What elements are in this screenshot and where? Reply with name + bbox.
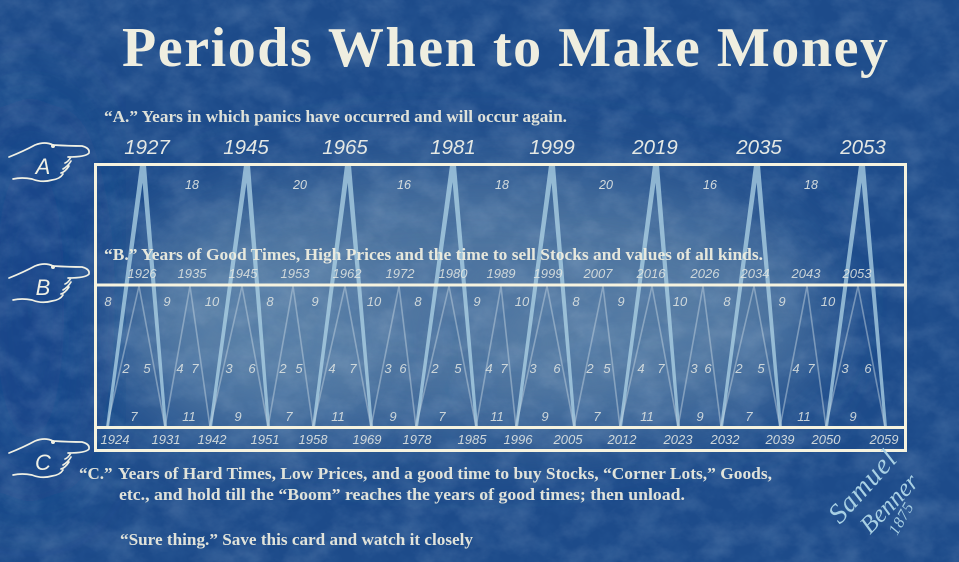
middle interval numbers: 6: [704, 361, 712, 376]
row B years: 1953: [281, 266, 310, 281]
icon: pointing hand C: [9, 439, 89, 477]
middle interval numbers: 5: [295, 361, 303, 376]
middle interval numbers: 4: [328, 361, 336, 376]
text block: sure thing note: “Sure thing.” Save this card and watch it closely: [120, 530, 474, 549]
intervals from good years: 8: [414, 294, 422, 309]
middle interval numbers: 7: [500, 361, 508, 376]
intervals between hard times years: 9: [849, 409, 857, 424]
row B years: 1945: [229, 266, 258, 281]
row B years: 1972: [386, 266, 415, 281]
intervals between hard times years: 11: [490, 409, 504, 424]
middle interval numbers: 4: [637, 361, 645, 376]
row C years: [101, 432, 898, 447]
row B years: 1926: [128, 266, 157, 281]
middle interval numbers: 5: [757, 361, 765, 376]
intervals from good years: 8: [723, 294, 731, 309]
row C years: 2032: [710, 432, 740, 447]
intervals between hard times years: [130, 409, 857, 424]
row B years: 2007: [583, 266, 613, 281]
middle interval numbers: 4: [792, 361, 800, 376]
row B years: 2043: [791, 266, 821, 281]
intervals from good years: [104, 294, 836, 309]
text block: B description: “B.” Years of Good Times, High Prices and the time to sell Stocks and values of all kinds.: [104, 245, 763, 264]
intervals from good years: 9: [778, 294, 786, 309]
row C years: 1996: [504, 432, 533, 447]
icon: pointing hand B: B: [36, 275, 50, 300]
icon: pointing hand C: C: [35, 450, 51, 475]
row B years: 2034: [740, 266, 769, 281]
icon: pointing hand A: A: [34, 154, 50, 179]
row C years: 2023: [663, 432, 693, 447]
middle interval numbers: 7: [807, 361, 815, 376]
text block: C description: Years of Hard Times, Low Prices, and a good time to buy Stocks, “Corner Lots,” Goods,: [118, 464, 772, 483]
intervals between hard times years: 11: [797, 409, 811, 424]
middle interval numbers: 2: [585, 361, 594, 376]
intervals from good years: 10: [821, 294, 836, 309]
chart: panic, good times and hard times cycle diagram: [95, 136, 906, 450]
middle interval numbers: 3: [690, 361, 698, 376]
intervals between hard times years: 7: [593, 409, 601, 424]
middle interval numbers: 7: [191, 361, 199, 376]
intervals between panic years: 20: [292, 178, 307, 192]
middle interval numbers: 2: [278, 361, 287, 376]
row C years: 2050: [811, 432, 841, 447]
row A years: 1981: [430, 136, 476, 159]
text block: A description: “A.” Years in which panics have occurred and will occur again.: [104, 107, 567, 126]
row A years: 1945: [223, 136, 269, 159]
intervals between hard times years: 11: [331, 409, 345, 424]
intervals from good years: 9: [617, 294, 625, 309]
intervals between hard times years: 9: [696, 409, 704, 424]
row C years: 1942: [198, 432, 227, 447]
intervals between panic years: 18: [495, 178, 509, 192]
row A years: 2035: [735, 136, 782, 159]
row A years: 1999: [529, 136, 575, 159]
intervals between hard times years: 11: [182, 409, 196, 424]
middle interval numbers: 5: [143, 361, 151, 376]
row C years: 1958: [299, 432, 328, 447]
row A years: 1965: [322, 136, 368, 159]
row B years: 1989: [487, 266, 515, 281]
intervals between hard times years: 7: [745, 409, 753, 424]
title: Periods When to Make Money: [122, 17, 888, 79]
middle interval numbers: 7: [657, 361, 665, 376]
intervals from good years: 10: [367, 294, 382, 309]
intervals between hard times years: 7: [285, 409, 293, 424]
middle interval numbers: 2: [430, 361, 439, 376]
intervals between hard times years: 7: [438, 409, 446, 424]
intervals between hard times years: 7: [130, 409, 138, 424]
intervals between panic years: 16: [397, 178, 411, 192]
row B years: 1980: [439, 266, 468, 281]
text block: C description: “C.”: [79, 464, 113, 483]
row C years: 1969: [353, 432, 381, 447]
middle interval numbers: 7: [349, 361, 357, 376]
intervals from good years: 10: [515, 294, 530, 309]
middle interval numbers: 2: [734, 361, 743, 376]
row C years: 1951: [251, 432, 279, 447]
middle interval numbers: 6: [864, 361, 872, 376]
middle interval numbers: 2: [121, 361, 130, 376]
intervals from good years: 10: [205, 294, 220, 309]
middle interval numbers: 5: [454, 361, 462, 376]
intervals between panic years: 18: [804, 178, 818, 192]
middle interval numbers: 4: [176, 361, 184, 376]
row B years: 1999: [534, 266, 562, 281]
row C years: 1985: [458, 432, 487, 447]
row B years: [128, 266, 872, 281]
intervals from good years: 10: [673, 294, 688, 309]
text block: C description: [79, 464, 772, 504]
frame with row dividers: [95, 164, 906, 450]
row A years: 2019: [631, 136, 678, 159]
intervals between panic years: 16: [703, 178, 717, 192]
row A years: 2053: [839, 136, 886, 159]
signature: Samuel Benner 1875: Benner: [855, 468, 925, 539]
icon: pointing hand B: [9, 264, 89, 302]
middle interval numbers: [121, 361, 872, 376]
intervals between hard times years: 9: [541, 409, 549, 424]
signature: Samuel Benner 1875: 1875: [886, 500, 917, 538]
large triangles: panic years: [106, 165, 887, 427]
middle interval numbers: 3: [225, 361, 233, 376]
middle interval numbers: 6: [248, 361, 256, 376]
icon: pointing hand A: [9, 143, 89, 181]
row C years: 2012: [607, 432, 637, 447]
row C years: 2039: [765, 432, 794, 447]
row A years: [124, 136, 886, 159]
row B years: 1935: [178, 266, 207, 281]
row B years: 1962: [333, 266, 362, 281]
intervals from good years: 9: [311, 294, 319, 309]
middle interval numbers: 4: [485, 361, 493, 376]
row A years: 1927: [124, 136, 171, 159]
signature: Samuel Benner 1875: Samuel: [822, 444, 904, 530]
middle interval numbers: 5: [603, 361, 611, 376]
middle interval numbers: 6: [553, 361, 561, 376]
text block: C description: etc., and hold till the “Boom” reaches the years of good times; then unload.: [119, 485, 685, 504]
thin triangles: good times years: [107, 286, 885, 427]
intervals from good years: 9: [473, 294, 481, 309]
row C years: 2059: [869, 432, 898, 447]
row C years: 1924: [101, 432, 129, 447]
row B years: 2016: [636, 266, 666, 281]
intervals between hard times years: 11: [640, 409, 654, 424]
intervals from good years: 8: [104, 294, 112, 309]
intervals between hard times years: 9: [389, 409, 397, 424]
row B years: 2053: [842, 266, 872, 281]
middle interval numbers: 3: [384, 361, 392, 376]
intervals from good years: 9: [163, 294, 171, 309]
intervals between panic years: 20: [598, 178, 613, 192]
middle interval numbers: 3: [529, 361, 537, 376]
row B years: 2026: [690, 266, 720, 281]
row C years: 2005: [553, 432, 583, 447]
intervals between hard times years: 9: [234, 409, 242, 424]
middle interval numbers: 6: [399, 361, 407, 376]
intervals between panic years: [185, 178, 818, 192]
intervals from good years: 8: [572, 294, 580, 309]
intervals from good years: 8: [266, 294, 274, 309]
intervals between panic years: 18: [185, 178, 199, 192]
row C years: 1978: [403, 432, 432, 447]
row C years: 1931: [152, 432, 180, 447]
middle interval numbers: 3: [841, 361, 849, 376]
